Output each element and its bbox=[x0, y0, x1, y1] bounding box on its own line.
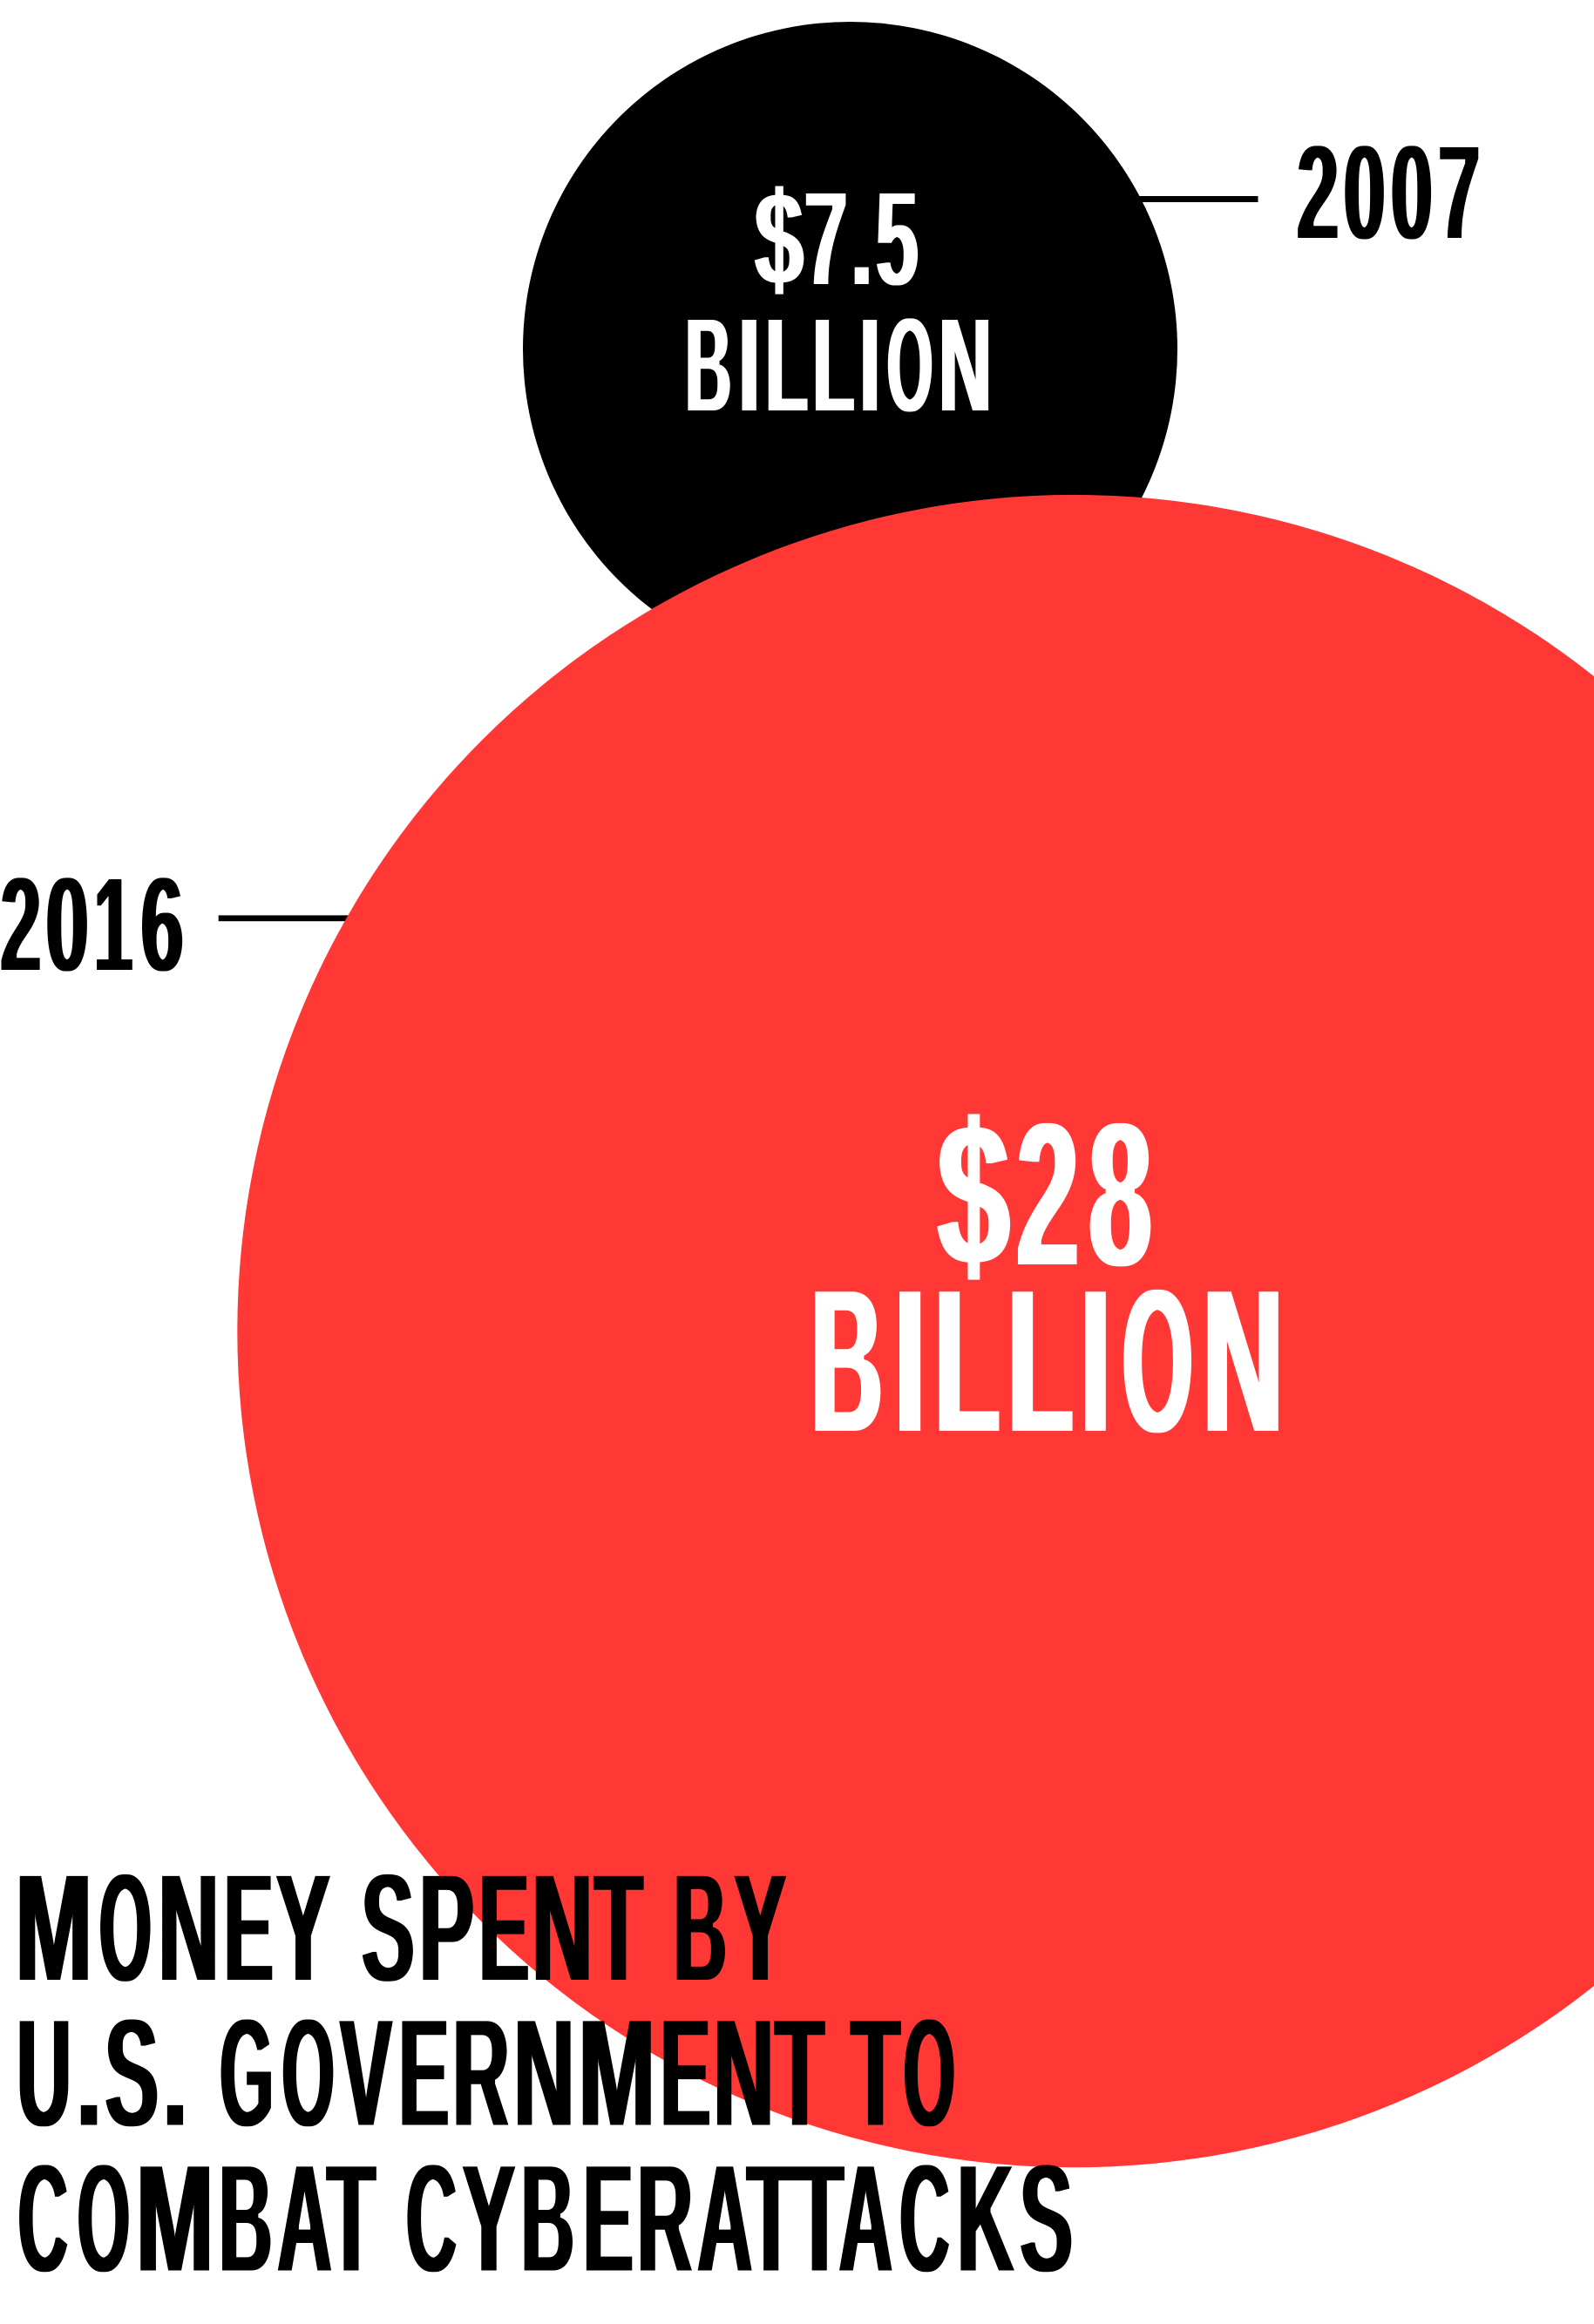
title: O bbox=[78, 2131, 130, 2306]
year label: 2007 bbox=[1297, 117, 1480, 269]
title: . bbox=[77, 1985, 101, 2159]
title: G bbox=[220, 1985, 274, 2159]
year label: 2016: 6 bbox=[141, 849, 183, 1001]
title: M bbox=[136, 2131, 214, 2306]
title: T bbox=[327, 2131, 376, 2306]
value: $28 billion: I bbox=[1081, 1246, 1110, 1477]
year label: 2007: 2 bbox=[1297, 117, 1339, 269]
title: M bbox=[579, 1985, 655, 2159]
value: $7.5 billion: B bbox=[685, 289, 731, 442]
value: $7.5 billion bbox=[685, 163, 992, 442]
title: V bbox=[340, 1985, 392, 2159]
title: B bbox=[674, 1840, 727, 2015]
title: S bbox=[362, 1840, 415, 2015]
title: M bbox=[16, 1840, 92, 2015]
red circle: 2016 spending bbox=[237, 495, 1594, 2167]
title: T bbox=[594, 1840, 643, 2015]
title: Y bbox=[462, 2131, 516, 2306]
value: $7.5 billion: L bbox=[813, 289, 854, 442]
year label: 2016 bbox=[1, 849, 183, 1001]
title: T bbox=[795, 2131, 844, 2306]
value: $7.5 billion: . bbox=[851, 163, 872, 315]
title: T bbox=[747, 2131, 795, 2306]
value: $28 billion: $ bbox=[938, 1080, 1009, 1311]
value: $28 billion: L bbox=[1007, 1246, 1073, 1477]
title: B bbox=[219, 2131, 272, 2306]
value: $28 billion bbox=[811, 1080, 1283, 1477]
value: $7.5 billion: $ bbox=[755, 163, 804, 315]
title: N bbox=[514, 1985, 574, 2159]
value: $7.5 billion: I bbox=[739, 289, 760, 442]
title: K bbox=[957, 2131, 1014, 2306]
value: $28 billion: 2 bbox=[1016, 1080, 1079, 1311]
title: U bbox=[17, 1985, 71, 2159]
value: $7.5 billion: O bbox=[887, 289, 933, 442]
title: A bbox=[277, 2131, 332, 2306]
title: E bbox=[479, 1840, 529, 2015]
value: $28 billion: L bbox=[934, 1246, 1000, 1477]
title bbox=[16, 1840, 1073, 2306]
title: E bbox=[399, 1985, 449, 2159]
title: B bbox=[521, 2131, 574, 2306]
title: . bbox=[163, 1985, 187, 2159]
title: P bbox=[419, 1840, 474, 2015]
title: R bbox=[637, 2131, 693, 2306]
title: N bbox=[159, 1840, 219, 2015]
title: E bbox=[583, 2131, 634, 2306]
title: A bbox=[697, 2131, 753, 2306]
year label: 2016: 0 bbox=[46, 849, 89, 1001]
year label: 2007: 7 bbox=[1439, 117, 1480, 269]
title: S bbox=[1020, 2131, 1073, 2306]
title: O bbox=[99, 1840, 152, 2015]
value: $7.5 billion: N bbox=[939, 289, 992, 442]
year label: 2007: 0 bbox=[1344, 117, 1385, 269]
black circle: 2007 spending bbox=[523, 22, 1177, 676]
value: $28 billion: N bbox=[1203, 1246, 1283, 1477]
title: C bbox=[899, 2131, 950, 2306]
title: O bbox=[904, 1985, 955, 2159]
title: T bbox=[851, 1985, 900, 2159]
title: R bbox=[453, 1985, 509, 2159]
leader line: 2007 bbox=[1133, 196, 1258, 202]
title: T bbox=[775, 1985, 824, 2159]
title: O bbox=[282, 1985, 335, 2159]
year label: 2007: 0 bbox=[1391, 117, 1433, 269]
value: $28 billion: O bbox=[1123, 1246, 1192, 1477]
title: C bbox=[406, 2131, 457, 2306]
title: N bbox=[532, 1840, 593, 2015]
title: C bbox=[18, 2131, 68, 2306]
value: $28 billion: 8 bbox=[1089, 1080, 1151, 1311]
title: S bbox=[105, 1985, 159, 2159]
leader line: 2016 bbox=[219, 915, 358, 921]
value: $28 billion: B bbox=[811, 1246, 883, 1477]
value: $7.5 billion: L bbox=[765, 289, 808, 442]
year label: 2016: 2 bbox=[1, 849, 41, 1001]
year label: 2016: 1 bbox=[94, 849, 132, 1001]
title: E bbox=[661, 1985, 710, 2159]
title: A bbox=[838, 2131, 892, 2306]
title: N bbox=[713, 1985, 774, 2159]
value: $7.5 billion: I bbox=[860, 289, 880, 442]
title: Y bbox=[275, 1840, 330, 2015]
title: E bbox=[224, 1840, 274, 2015]
value: $28 billion: I bbox=[895, 1246, 926, 1477]
title: Y bbox=[734, 1840, 787, 2015]
value: $7.5 billion: 5 bbox=[876, 163, 919, 315]
value: $7.5 billion: 7 bbox=[804, 163, 847, 315]
